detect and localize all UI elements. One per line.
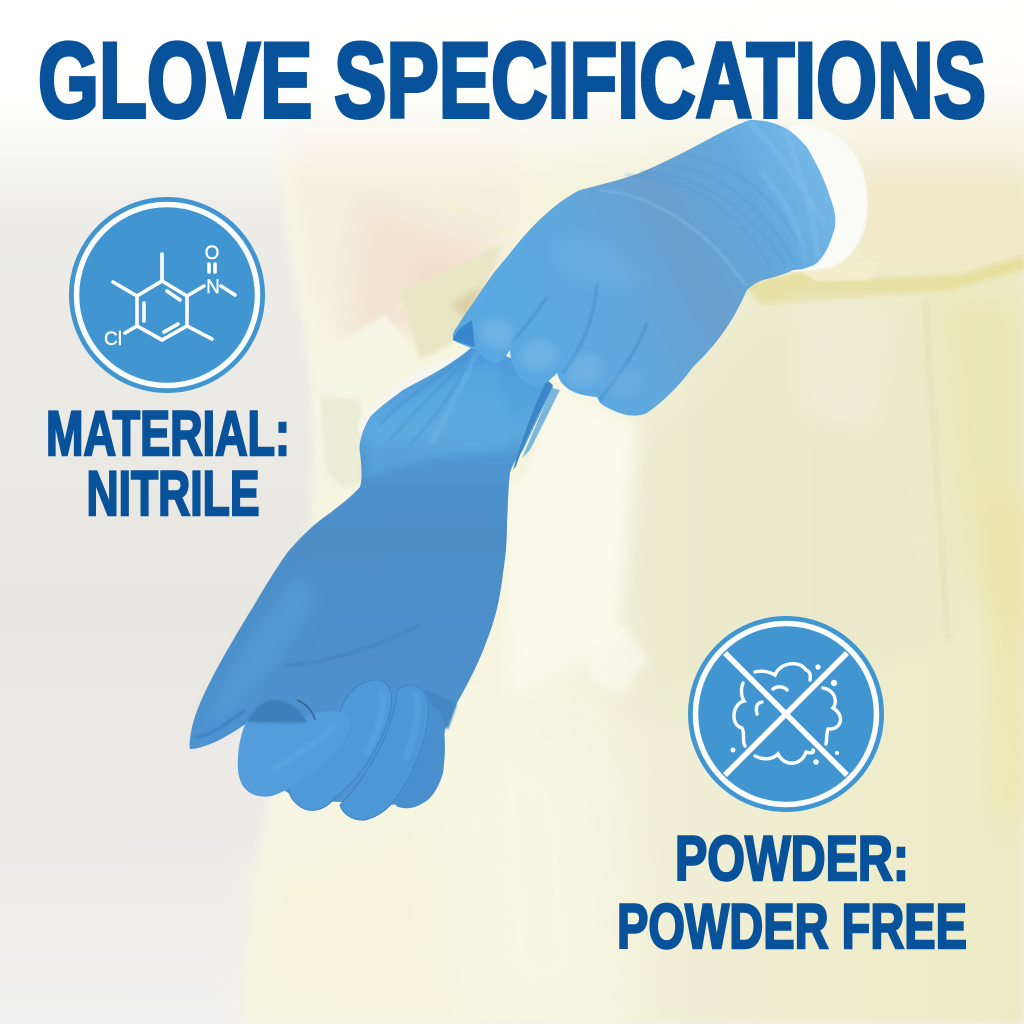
icon: powder free: [688, 616, 884, 812]
gown photo: [243, 0, 1024, 1024]
icon: chemical structure: [69, 197, 265, 393]
lower knit cuff: [357, 350, 470, 450]
white fade at top: [0, 0, 1024, 190]
icon: chemical structure: Cl: [104, 329, 122, 350]
label: material: NITRILE: [86, 459, 260, 529]
icon: chemical structure: N: [206, 277, 220, 298]
label: material: MATERIAL:: [46, 399, 290, 469]
upper knit cuff: [790, 125, 868, 272]
label: powder: [617, 824, 967, 962]
label: material: [46, 399, 290, 529]
upper glove: cuff and back of hand: [453, 120, 835, 416]
upper glove: gripping fingers: [453, 236, 650, 400]
label: powder: POWDER:: [675, 824, 909, 894]
lower glove: curled fingers: [238, 680, 445, 820]
lower glove: wrist and hand: [190, 347, 560, 805]
icon: chemical structure: O: [205, 243, 219, 264]
